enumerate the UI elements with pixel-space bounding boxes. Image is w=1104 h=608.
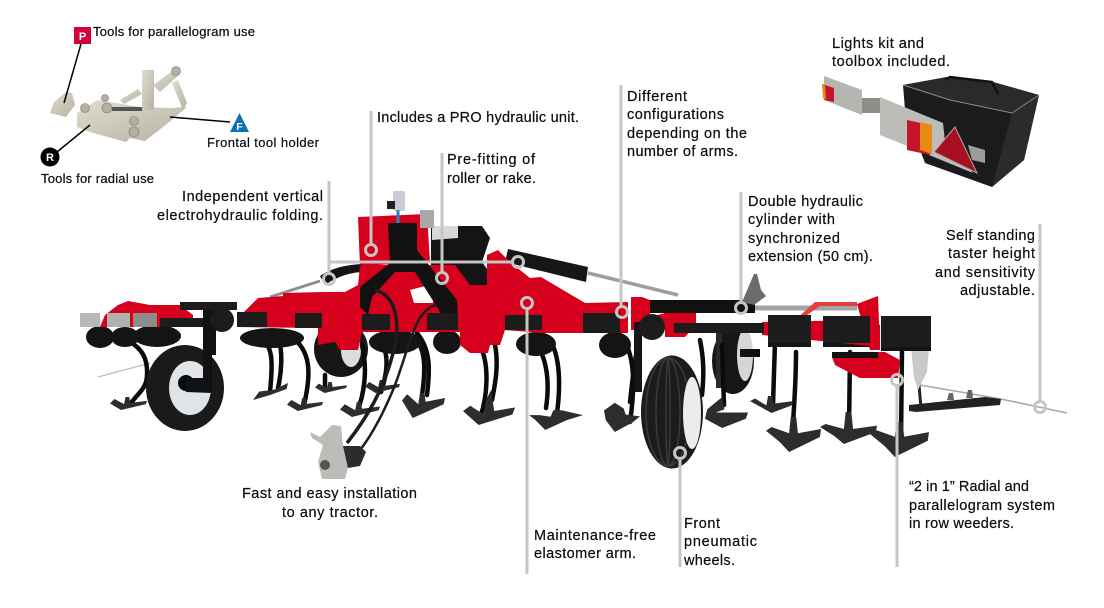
label: frontal tool holder: Frontal tool holder	[207, 135, 320, 150]
callout: installation: Fast and easy installation	[242, 486, 417, 502]
A-frame top link	[360, 223, 878, 358]
toolbox	[903, 77, 1039, 187]
callout: double cylinder: synchronized	[748, 231, 840, 247]
callout: pre-fitting: Pre-fitting of	[447, 152, 536, 168]
callout: 2 in 1 system: “2 in 1” Radial and	[909, 479, 1029, 495]
hydraulic hoses	[347, 290, 436, 450]
callout: double cylinder	[748, 194, 873, 265]
callout: front wheels: Front	[684, 516, 720, 532]
label: tools for radial use: Tools for radial use	[41, 171, 154, 186]
shanks	[116, 333, 902, 440]
leader lines and ring markers	[324, 85, 1046, 574]
callout: front wheels	[683, 516, 757, 569]
callout: taster: adjustable.	[960, 283, 1035, 299]
machine: row crop cultivator	[80, 191, 1067, 479]
spring mounts under beam	[86, 325, 931, 358]
callout: 2 in 1 system	[909, 479, 1055, 532]
cylinders	[270, 249, 857, 320]
callout: pre-fitting: roller or rake.	[447, 171, 536, 187]
callout: taster: taster height	[948, 246, 1035, 262]
callout: lights kit: Lights kit and	[832, 36, 924, 52]
callout: taster: Self standing	[946, 228, 1035, 244]
tool holder body	[50, 70, 187, 142]
callout: PRO hydraulic unit: Includes a PRO hydraulic unit.	[377, 110, 579, 126]
callout: double cylinder: extension (50 cm).	[748, 249, 873, 265]
callout: vertical folding: electrohydraulic folding.	[157, 208, 323, 224]
tool boxes on beam	[80, 274, 931, 392]
callout: 2 in 1 system: parallelogram system	[909, 498, 1055, 514]
callout: vertical folding	[157, 189, 323, 224]
callout: double cylinder: Double hydraulic	[748, 194, 863, 210]
callout: taster	[935, 228, 1036, 299]
light plates and lamps	[822, 76, 985, 173]
callout: configurations: Different	[627, 89, 687, 105]
callout: elastomer arm	[534, 528, 656, 562]
callout: lights kit	[832, 36, 950, 70]
F marker and leader: F	[236, 121, 243, 133]
callout: pre-fitting	[447, 152, 536, 187]
callout: configurations: configurations	[627, 107, 724, 123]
frame window	[410, 284, 433, 303]
callout: configurations: number of arms.	[627, 144, 738, 160]
callout: elastomer arm: elastomer arm.	[534, 546, 636, 562]
callout: front wheels: wheels.	[683, 553, 735, 569]
sensor taster rod and skid	[98, 347, 1067, 413]
F marker and leader	[170, 113, 249, 133]
callout: installation	[242, 486, 417, 521]
shoes	[110, 380, 929, 457]
callout: lights kit: toolbox included.	[832, 54, 950, 70]
red frame	[100, 250, 900, 378]
callout: front wheels: pneumatic	[684, 534, 757, 550]
left wheel	[146, 328, 224, 431]
callout: 2 in 1 system: in row weeders.	[909, 516, 1014, 532]
callout: double cylinder: cylinder with	[748, 212, 835, 228]
rear wheels	[314, 321, 760, 394]
callout: installation: to any tractor.	[282, 505, 378, 521]
callout: elastomer arm: Maintenance-free	[534, 528, 656, 544]
label: tools for parallelogram use: Tools for parallelogram use	[93, 24, 255, 39]
R marker and leader: R	[46, 152, 54, 164]
R marker and leader	[40, 125, 90, 166]
callout: configurations	[627, 89, 747, 160]
P marker and leader: P	[79, 31, 86, 43]
hopper and hydraulic unit	[358, 191, 500, 287]
PTO gearbox	[310, 425, 366, 479]
lights kit and toolbox	[822, 76, 1039, 187]
callout: configurations: depending on the	[627, 126, 747, 142]
callout: taster: and sensitivity	[935, 265, 1036, 281]
tool holder illustration	[40, 27, 249, 166]
P marker and leader	[64, 27, 91, 103]
front wheel	[641, 356, 703, 468]
callout: vertical folding: Independent vertical	[182, 189, 323, 205]
